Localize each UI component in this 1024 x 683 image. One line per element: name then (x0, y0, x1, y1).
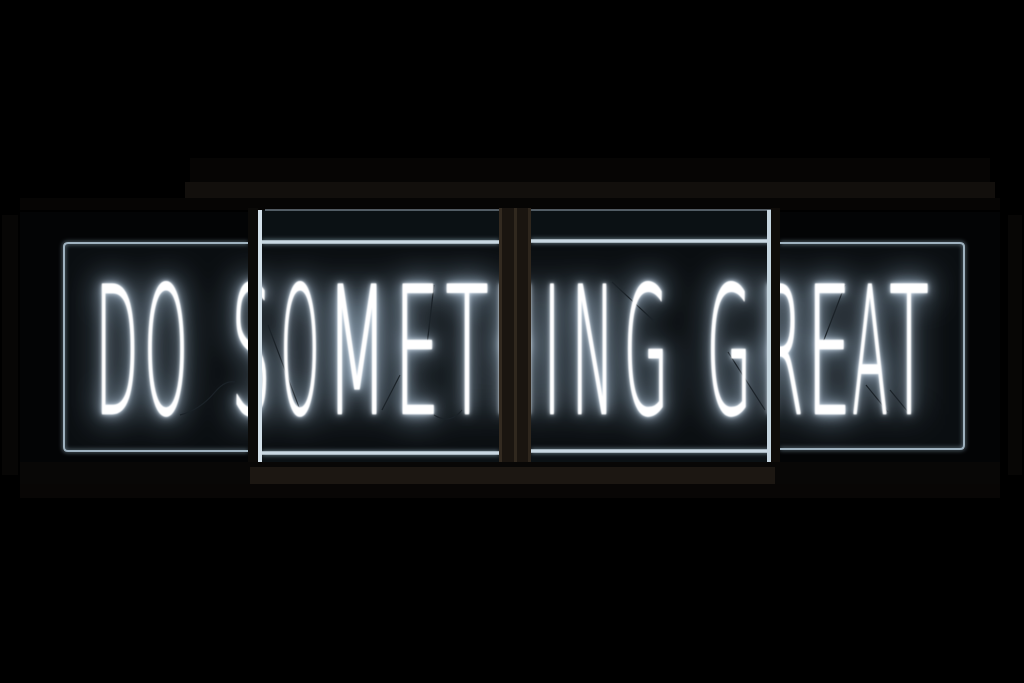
sign backing board (65, 243, 963, 450)
neon glow (95, 249, 929, 456)
rectangular neon border (64, 210, 964, 465)
window frame header (20, 158, 1000, 210)
window side jambs (2, 215, 1022, 475)
glass panes (262, 210, 771, 465)
mounting wires (180, 282, 908, 419)
neon lettering: DO SOMETHING GREAT (95, 249, 929, 456)
window stiles and centre mullion (248, 208, 780, 470)
neon sign photograph scene (58, 182, 995, 484)
window sill (20, 462, 1000, 498)
dark side window panes (20, 212, 1000, 462)
